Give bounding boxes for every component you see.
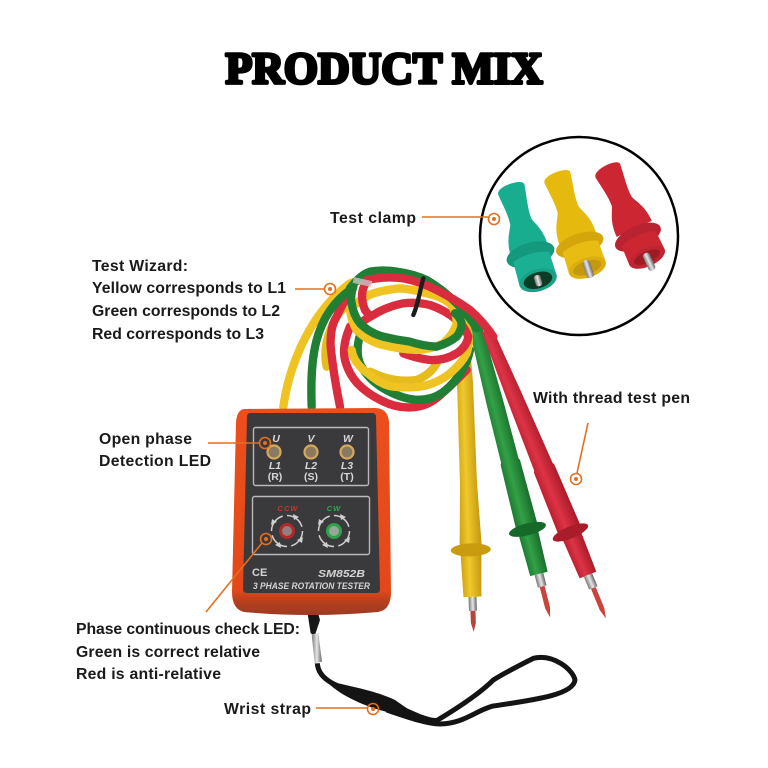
callout: thread test pen: With thread test pen	[533, 390, 690, 407]
callout: open phase LED: Detection LED	[99, 453, 211, 470]
red probe	[469, 323, 623, 626]
panel: tester device	[232, 408, 391, 615]
callout: test wizard: Test Wizard:	[92, 258, 188, 275]
callout: wrist strap	[224, 701, 378, 718]
icon: red clamp	[583, 155, 675, 280]
callout: phase continuous check LED: Red is anti-relative	[76, 666, 221, 683]
device face	[243, 413, 380, 593]
title: PRODUCT MIX	[226, 44, 543, 93]
callout: wrist strap: Wrist strap	[224, 701, 311, 718]
callout: test wizard: Green corresponds to L2	[92, 303, 280, 320]
callout: test wizard: Red corresponds to L3	[92, 326, 264, 343]
upper LED box: L1	[269, 460, 281, 472]
lower rotation box: CCW	[278, 504, 298, 513]
panel: test clamp inset	[480, 137, 678, 335]
callout: test wizard: Yellow corresponds to L1	[92, 280, 286, 297]
lower rotation box: CW	[327, 504, 341, 513]
device markings: SM852B	[318, 569, 365, 580]
callout: test clamp: Test clamp	[330, 210, 416, 227]
coiled wires	[283, 270, 493, 407]
upper LED box: V	[307, 433, 315, 445]
callout: phase continuous check LED	[76, 534, 300, 683]
device body	[232, 408, 391, 615]
icon: yellow clamp	[532, 164, 614, 286]
device markings	[252, 567, 370, 592]
yellow probe	[444, 360, 494, 633]
device markings: 3 PHASE ROTATION TESTER	[253, 581, 370, 592]
wrist strap	[307, 611, 575, 724]
upper LED box: W	[343, 433, 354, 445]
upper LED box: (T)	[340, 471, 354, 483]
callout: thread test pen	[533, 390, 690, 484]
callout: phase continuous check LED: Phase continuous check LED:	[76, 621, 300, 638]
upper LED box	[254, 428, 368, 486]
upper LED box: U	[272, 433, 280, 445]
callout: open phase LED	[99, 431, 270, 470]
callout: phase continuous check LED: Green is correct relative	[76, 644, 260, 661]
callout: open phase LED: Open phase	[99, 431, 192, 448]
lower rotation box	[252, 496, 370, 554]
device markings: CE	[252, 567, 267, 579]
upper LED box: L3	[341, 460, 353, 472]
green probe	[457, 320, 569, 622]
upper LED box: L2	[305, 460, 317, 472]
callout: test wizard	[92, 258, 336, 343]
callout: test clamp	[330, 210, 500, 227]
test leads	[444, 320, 623, 633]
upper LED box: (S)	[304, 471, 318, 483]
icon: teal clamp	[486, 177, 565, 298]
upper LED box: (R)	[268, 471, 282, 483]
